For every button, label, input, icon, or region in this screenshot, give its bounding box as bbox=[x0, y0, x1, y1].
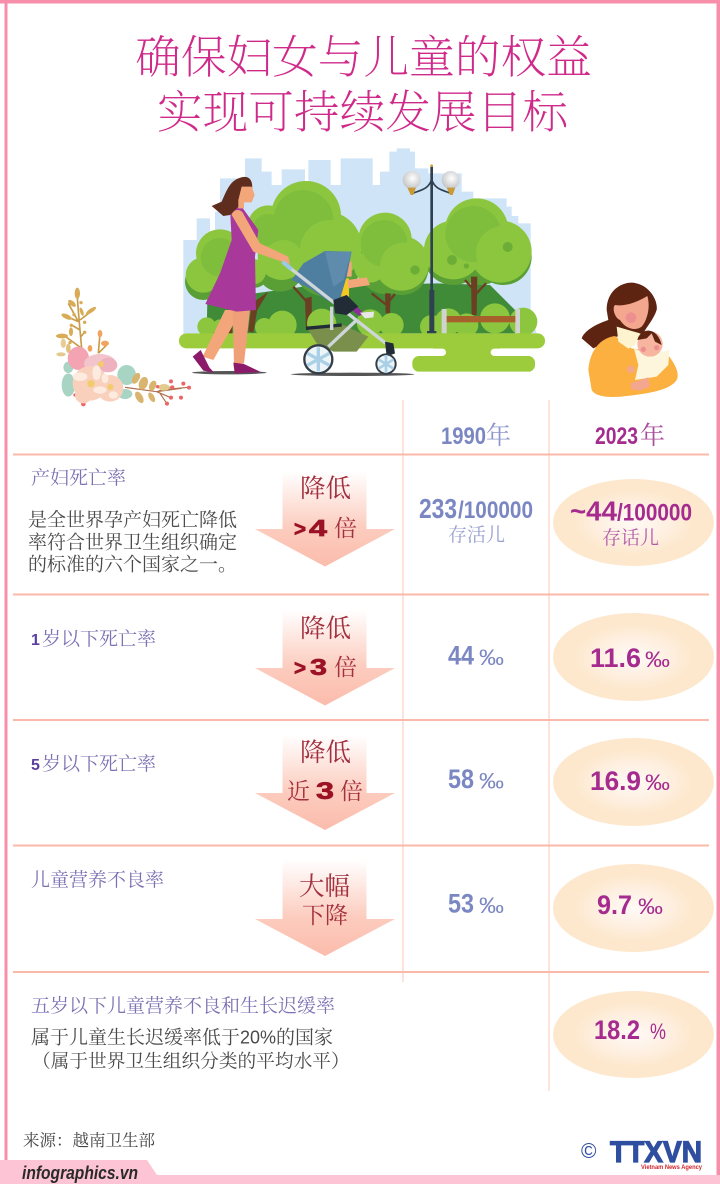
value 1990 bbox=[448, 888, 504, 918]
value 1990: 233 bbox=[419, 493, 457, 524]
arrow: decrease more than 3 times: 3 bbox=[310, 654, 327, 680]
park bench bbox=[442, 309, 520, 333]
ground bbox=[179, 333, 551, 376]
row: under-1 mortality bbox=[31, 610, 714, 706]
row label: 岁以下死亡率 bbox=[42, 628, 156, 650]
city skyline bbox=[183, 148, 537, 333]
arrow: sharp decline bbox=[255, 860, 395, 956]
row label: 1 bbox=[31, 632, 40, 649]
column header: 2023: 2023 bbox=[595, 423, 638, 450]
logo: TTXVN: Vietnam News Agency bbox=[641, 1165, 703, 1171]
arrow: decrease more than 4 times: 4 bbox=[309, 515, 327, 541]
arrow: decrease more than 4 times: > bbox=[294, 518, 306, 541]
row description: 率符合世界卫生组织确定 bbox=[28, 532, 237, 554]
value 1990 bbox=[448, 764, 504, 794]
row label: 儿童营养不良率 bbox=[31, 869, 164, 891]
row: under-5 malnutrition and stunting bbox=[31, 991, 714, 1078]
value 1990: 存活儿 bbox=[448, 524, 505, 546]
arrow: decrease nearly 3 times: 3 bbox=[316, 778, 334, 805]
value 2023: ~44 bbox=[570, 496, 617, 526]
value 2023 bbox=[553, 613, 714, 701]
row description: 的标准的六个国家之一。 bbox=[28, 554, 237, 576]
value 2023: % bbox=[650, 1019, 666, 1044]
row description bbox=[28, 509, 237, 576]
arrow: sharp decline: 下降 bbox=[302, 903, 348, 928]
value 2023: 11.6 bbox=[590, 643, 641, 673]
arrow: decrease more than 3 times: 降低 bbox=[300, 614, 351, 643]
row label: 岁以下死亡率 bbox=[42, 753, 156, 775]
arrow: decrease more than 4 times bbox=[255, 472, 395, 566]
value 2023: ‰ bbox=[638, 894, 663, 919]
arrow: decrease more than 3 times bbox=[255, 610, 395, 706]
illustration: woman pushing stroller in a park bbox=[179, 148, 551, 376]
table grid lines bbox=[13, 400, 709, 1091]
stroller bbox=[283, 251, 396, 374]
value 2023 bbox=[553, 479, 714, 566]
value 1990 bbox=[419, 493, 533, 546]
value 1990: ‰ bbox=[479, 893, 504, 918]
value 2023: 18.2 bbox=[594, 1015, 640, 1045]
value 2023: ‰ bbox=[645, 647, 670, 672]
value 1990: 58 bbox=[448, 764, 474, 794]
value 2023: ‰ bbox=[645, 770, 670, 795]
arrow: decrease nearly 3 times: 降低 bbox=[300, 738, 351, 767]
arrow: decrease more than 4 times: 倍 bbox=[334, 516, 357, 541]
logo: TTXVN bbox=[581, 1136, 703, 1171]
value 1990: ‰ bbox=[479, 645, 504, 670]
title: 确保妇女与儿童的权益 bbox=[135, 32, 592, 83]
bushes bbox=[197, 303, 537, 339]
footer band bbox=[0, 1160, 720, 1184]
street lamp bbox=[403, 164, 460, 333]
value 1990 bbox=[448, 640, 504, 670]
value 2023 bbox=[553, 864, 714, 952]
value 1990: ‰ bbox=[479, 768, 504, 794]
value 1990: 44 bbox=[448, 640, 474, 670]
logo: TTXVN: © bbox=[581, 1140, 597, 1163]
row description bbox=[31, 1026, 350, 1072]
row description: 属于儿童生长迟缓率低于20%的国家 bbox=[31, 1026, 333, 1048]
row: under-5 mortality bbox=[31, 735, 714, 830]
arrow: decrease more than 4 times: 降低 bbox=[300, 474, 351, 503]
value 1990: /100000 bbox=[458, 497, 533, 524]
value 2023 bbox=[553, 738, 714, 826]
trees bbox=[185, 181, 532, 333]
arrow: sharp decline: 大幅 bbox=[299, 872, 350, 901]
icon: floral decoration bbox=[56, 288, 191, 406]
logo: TTXVN: TTXVN bbox=[610, 1136, 702, 1169]
row: child malnutrition bbox=[31, 860, 714, 956]
arrow: decrease nearly 3 times bbox=[255, 735, 395, 830]
value 2023: 存话儿 bbox=[602, 527, 659, 549]
title: 实现可持续发展目标 bbox=[157, 87, 569, 138]
title bbox=[135, 32, 592, 138]
arrow: decrease nearly 3 times: 倍 bbox=[340, 779, 363, 804]
icon: mother holding baby bbox=[582, 283, 678, 397]
arrow: decrease nearly 3 times: 近 bbox=[287, 779, 310, 804]
row label: 产妇死亡率 bbox=[31, 467, 126, 489]
value 2023: 16.9 bbox=[590, 766, 641, 796]
value 1990: 53 bbox=[448, 888, 474, 918]
column header: 1990: 年 bbox=[486, 422, 511, 450]
woman bbox=[193, 177, 290, 373]
value 2023 bbox=[553, 991, 714, 1078]
column header: 2023: 年 bbox=[640, 422, 665, 450]
row description: 是全世界孕产妇死亡降低 bbox=[28, 509, 237, 531]
website: infographics.vn bbox=[22, 1163, 138, 1183]
row: maternal mortality bbox=[28, 467, 714, 576]
row description: （属于世界卫生组织分类的平均水平） bbox=[32, 1052, 350, 1072]
value 2023: 9.7 bbox=[597, 890, 632, 920]
arrow: decrease more than 3 times: > bbox=[294, 657, 306, 680]
source: 来源：越南卫生部 bbox=[23, 1131, 156, 1150]
column header: 1990: 1990 bbox=[441, 423, 486, 450]
arrow: decrease more than 3 times: 倍 bbox=[334, 655, 357, 680]
value 2023: /100000 bbox=[617, 500, 692, 526]
row label: 5 bbox=[31, 757, 40, 774]
row label: 五岁以下儿童营养不良和生长迟缓率 bbox=[31, 995, 335, 1017]
